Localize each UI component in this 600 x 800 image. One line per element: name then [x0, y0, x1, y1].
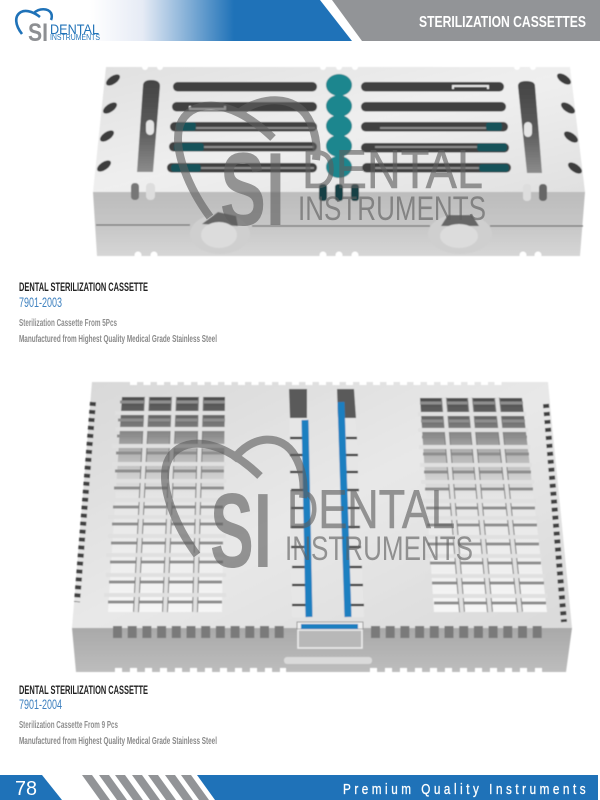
top cassette photo [93, 64, 585, 258]
watermark tooth [178, 100, 317, 217]
small corner slots [131, 183, 547, 201]
footer grey stripes [82, 775, 209, 800]
product 2 text [19, 683, 217, 747]
bottom cassette photo [72, 382, 572, 672]
watermark DENTAL: DENTAL [302, 138, 483, 200]
footer tagline: Premium Quality Instruments [343, 781, 586, 797]
slot highlights [190, 86, 490, 168]
teal pegs [326, 74, 352, 178]
page number tab [0, 775, 62, 800]
cassette seam [96, 225, 583, 226]
vertical slot right [518, 81, 542, 173]
watermark SI: SI [210, 472, 272, 590]
watermark INSTRUMENTS: INSTRUMENTS [298, 190, 486, 228]
watermark INSTRUMENTS: INSTRUMENTS [285, 530, 473, 568]
side slots [95, 71, 584, 176]
logo tooth outline [16, 9, 52, 34]
vertical slot left [137, 80, 160, 172]
long slots left [167, 82, 317, 172]
product 1 code: 7901-2003 [19, 295, 62, 310]
product 2 line 2: Manufactured from Highest Quality Medical Grade Stainless Steel [19, 736, 217, 747]
bottom row slots [113, 626, 546, 638]
logo DENTAL: DENTAL [50, 21, 99, 37]
cassette front face [72, 628, 572, 672]
teal small slots [319, 184, 359, 201]
long slots right [361, 82, 511, 172]
left grid [104, 397, 226, 612]
teal slot ends [171, 122, 509, 172]
product 1 heading: DENTAL STERILIZATION CASSETTE [19, 280, 148, 294]
left bolt [190, 212, 250, 254]
logo SI letters: SI [28, 19, 48, 47]
product 1 line 2: Manufactured from Highest Quality Medical Grade Stainless Steel [19, 334, 217, 345]
company logo [16, 9, 100, 47]
right grid [418, 398, 548, 612]
header band [90, 0, 600, 41]
top watermark [178, 100, 486, 248]
product 2 heading: DENTAL STERILIZATION CASSETTE [19, 683, 148, 697]
watermark DENTAL: DENTAL [287, 478, 455, 540]
bottom watermark [165, 440, 473, 590]
logo INSTRUMENTS: INSTRUMENTS [50, 33, 100, 42]
footer blue bar [197, 775, 598, 800]
product 2 line 1: Sterilization Cassette From 9 Pcs [19, 720, 118, 731]
product 2 code: 7901-2004 [19, 697, 62, 712]
bottom notches [115, 668, 545, 674]
top teeth [130, 381, 507, 385]
right bolt [428, 214, 492, 254]
header blue gradient banner [90, 0, 352, 41]
top notches [142, 64, 536, 70]
cassette lid [72, 382, 572, 628]
centre slots [289, 389, 364, 617]
side ticks [77, 402, 564, 622]
header grey title panel [332, 0, 600, 41]
cassette front face [93, 192, 585, 256]
footer band [0, 775, 598, 800]
blue strips [305, 402, 348, 617]
cassette lid [93, 67, 585, 192]
bottom notches [134, 252, 542, 258]
product 1 text [19, 280, 217, 345]
watermark SI: SI [220, 132, 285, 248]
page number: 78 [15, 778, 37, 800]
handle [284, 622, 372, 664]
watermark tooth [165, 440, 304, 555]
vertical slot pins [146, 120, 532, 137]
product 1 line 1: Sterilization Cassette From 5Pcs [19, 318, 117, 329]
